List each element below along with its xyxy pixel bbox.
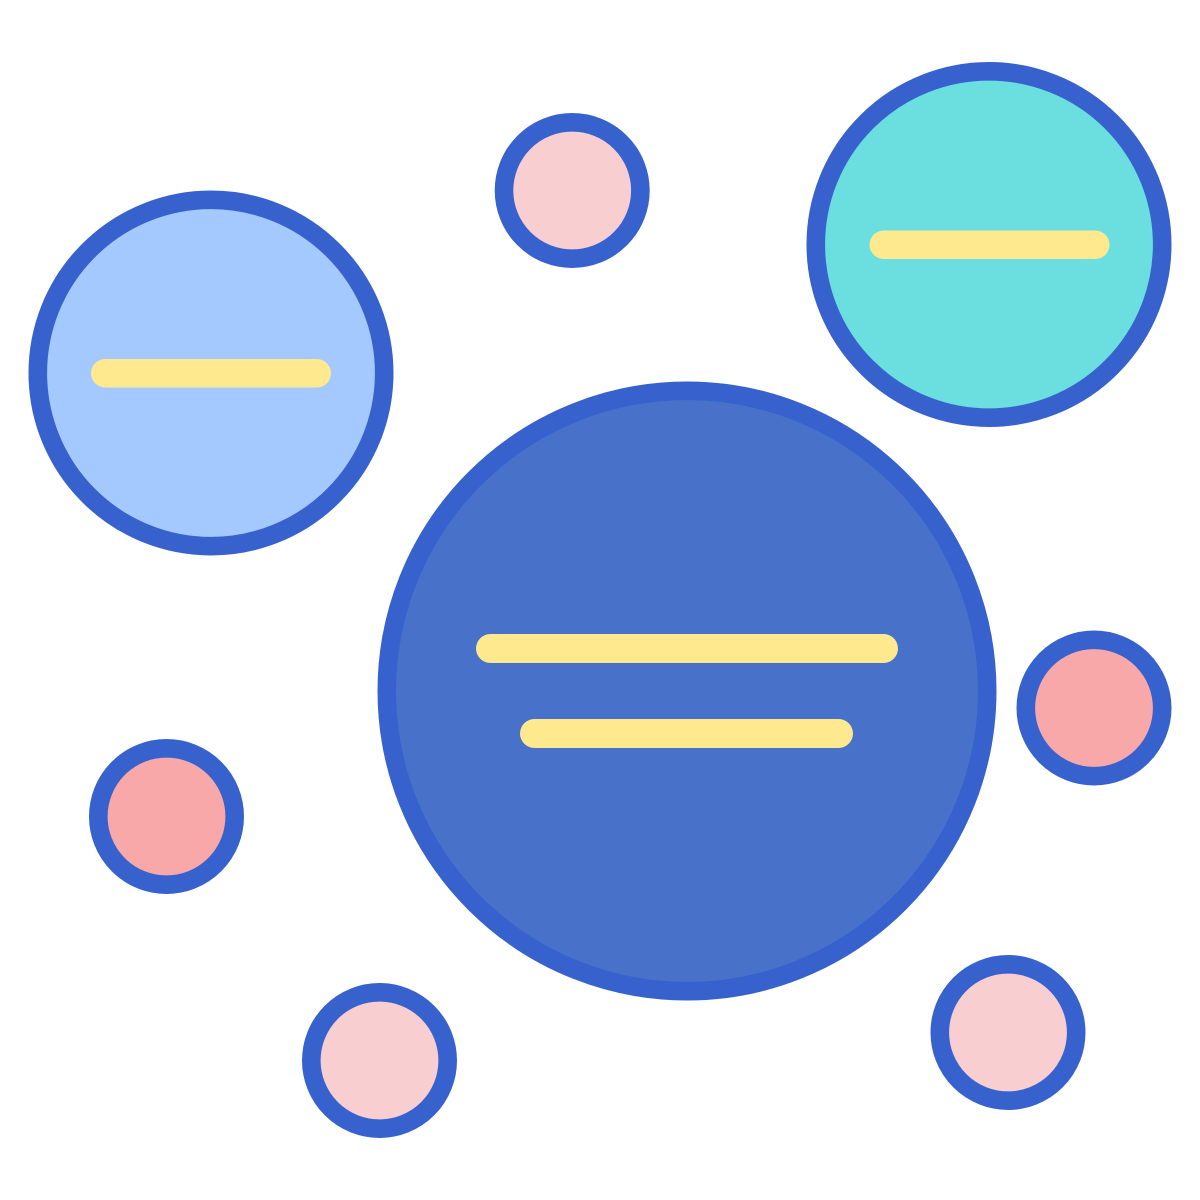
large central circle: [387, 391, 987, 991]
small pale pink circle bottom right: [940, 964, 1076, 1101]
small salmon circle right: [1026, 640, 1162, 776]
small pale pink circle bottom left: [311, 992, 448, 1129]
small salmon circle left: [98, 748, 235, 885]
small pale pink circle top: [504, 122, 640, 259]
light blue circle: [38, 200, 384, 546]
teal circle: [816, 71, 1162, 418]
